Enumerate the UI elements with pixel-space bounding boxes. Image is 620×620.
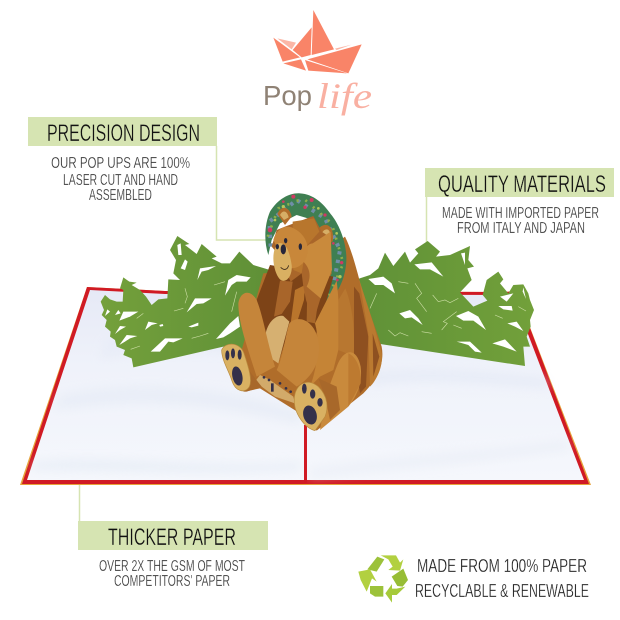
claws (263, 376, 292, 393)
nose and eyes (276, 238, 302, 254)
panel: quality materials (425, 168, 614, 244)
pop-up: left pine trees (101, 236, 270, 367)
pop-up: brown bear with wreath (222, 193, 382, 431)
pop-up card base (20, 287, 591, 485)
text: thicker description: COMPETITORS' PAPER (114, 573, 230, 590)
face (273, 227, 308, 268)
side slices (310, 280, 382, 430)
ear left (277, 208, 292, 225)
snow drifts (32, 331, 570, 478)
logo: Poplife (263, 10, 372, 116)
icon: left foot (222, 344, 251, 391)
bark scratches (370, 282, 526, 336)
text: quality description (442, 205, 599, 237)
panel: precision design (28, 117, 266, 240)
ear right (317, 225, 333, 243)
right leg (277, 319, 319, 387)
text: precision description (51, 155, 190, 204)
text: thicker description: OVER 2X THE GSM OF MOST (99, 558, 245, 575)
wreath (265, 193, 346, 306)
panel: thicker paper (78, 485, 268, 590)
snow patches (368, 253, 526, 353)
logo word: life: life (317, 76, 372, 116)
lower belly (255, 375, 295, 403)
bark scratches (131, 282, 237, 349)
heading: precision design: PRECISION DESIGN (47, 120, 200, 147)
callout: recyclable paper (358, 555, 589, 603)
snow patches (105, 243, 251, 352)
chest slices (265, 281, 319, 367)
torso dark ribs (257, 265, 333, 363)
left arm and leg (238, 293, 275, 377)
text: precision description: OUR POP UPS ARE 100% (51, 155, 190, 172)
muzzle (273, 243, 292, 281)
icon: recycle arrows (358, 555, 408, 603)
bear back body (242, 237, 382, 431)
centre fold (304, 425, 307, 483)
pop-up: right pine trees (357, 241, 534, 366)
text: thicker description (99, 558, 245, 590)
icon: right foot (294, 382, 327, 431)
heading: thicker paper: THICKER PAPER (108, 524, 236, 551)
text: precision description: LASER CUT AND HAND (63, 172, 178, 189)
head (272, 216, 332, 322)
icon: origami paper boat (273, 10, 362, 73)
text: precision description: ASSEMBLED (89, 187, 152, 204)
logo word: Pop: Pop (263, 80, 312, 111)
